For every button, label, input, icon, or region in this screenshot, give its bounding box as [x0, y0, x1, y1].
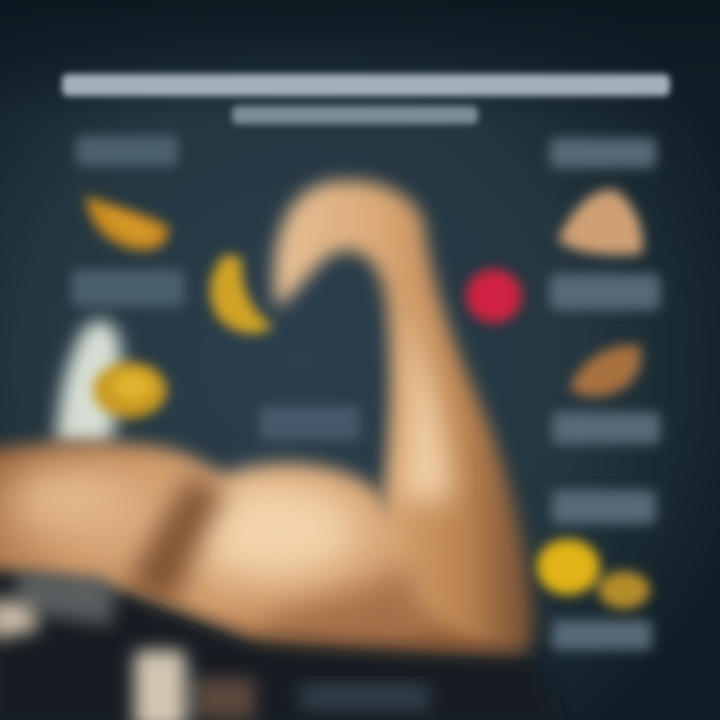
centre label — [260, 406, 360, 440]
upper arm lower mass — [0, 441, 530, 662]
title (illegible blurred text) — [62, 74, 670, 124]
flexed arm — [0, 181, 534, 662]
bottom text (illegible) — [300, 684, 430, 710]
left forearm highlight — [10, 470, 130, 530]
icon: left lower lemon — [93, 362, 167, 418]
crease shadow — [125, 475, 225, 605]
forearm and elbow — [270, 181, 534, 660]
forearm highlight — [400, 300, 452, 500]
right column labels — [550, 138, 660, 650]
bottom shadow area — [0, 572, 560, 720]
icon: centre banana slice — [210, 254, 274, 334]
icon: left top fruit slice — [86, 196, 168, 250]
icon: right top nut — [558, 190, 643, 255]
bicep highlight — [195, 485, 355, 575]
left column labels — [72, 136, 184, 306]
icon: right bottom lemons — [536, 539, 650, 609]
bicep lower shadow — [260, 560, 420, 650]
icon: red berry — [466, 269, 522, 323]
icon: right middle nut — [570, 345, 641, 397]
icon: milk bottle — [56, 320, 122, 445]
bottom left light shapes — [0, 598, 255, 720]
